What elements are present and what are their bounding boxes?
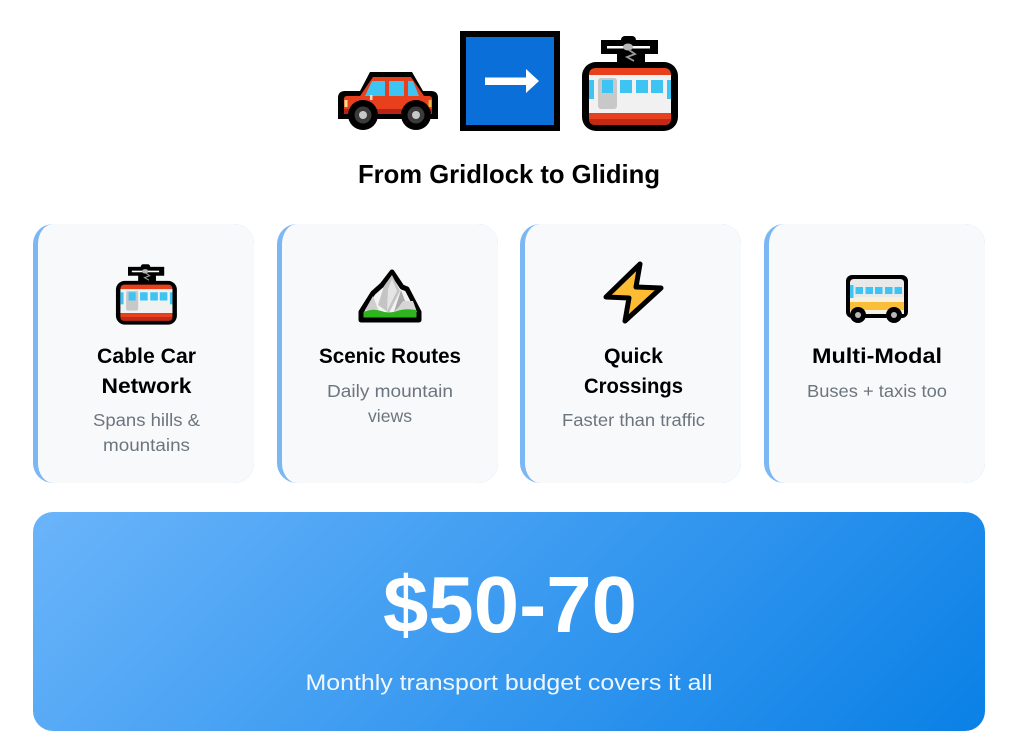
heading: Scenic Routes xyxy=(319,345,461,368)
panel: budget banner xyxy=(33,512,985,731)
icon: bus xyxy=(846,275,908,323)
description: Spans hills & xyxy=(93,410,200,430)
icon: aerial tramway xyxy=(116,264,177,325)
panel: cable car network xyxy=(33,224,254,483)
header xyxy=(338,31,678,189)
panel: multi-modal xyxy=(764,224,985,483)
description: mountains xyxy=(103,435,190,455)
panel: scenic routes xyxy=(277,224,498,483)
panel: quick crossings xyxy=(520,224,741,483)
heading: Quick xyxy=(604,345,663,368)
description: Buses + taxis too xyxy=(807,381,947,401)
big number: $50-70 xyxy=(383,560,637,649)
description: Faster than traffic xyxy=(562,410,705,430)
description: Daily mountain xyxy=(327,381,453,401)
icon: car xyxy=(338,72,438,130)
title: From Gridlock to Gliding xyxy=(358,161,660,189)
heading: Cable Car xyxy=(97,345,196,368)
description: views xyxy=(368,406,412,426)
icon: aerial tramway xyxy=(582,36,678,131)
heading: Multi-Modal xyxy=(812,345,942,368)
caption: Monthly transport budget covers it all xyxy=(306,670,712,695)
icon: right arrow xyxy=(460,31,560,131)
heading: Network xyxy=(102,375,192,398)
heading: Crossings xyxy=(584,375,683,398)
icon: mountain xyxy=(361,272,419,320)
icon: lightning bolt xyxy=(606,264,661,321)
